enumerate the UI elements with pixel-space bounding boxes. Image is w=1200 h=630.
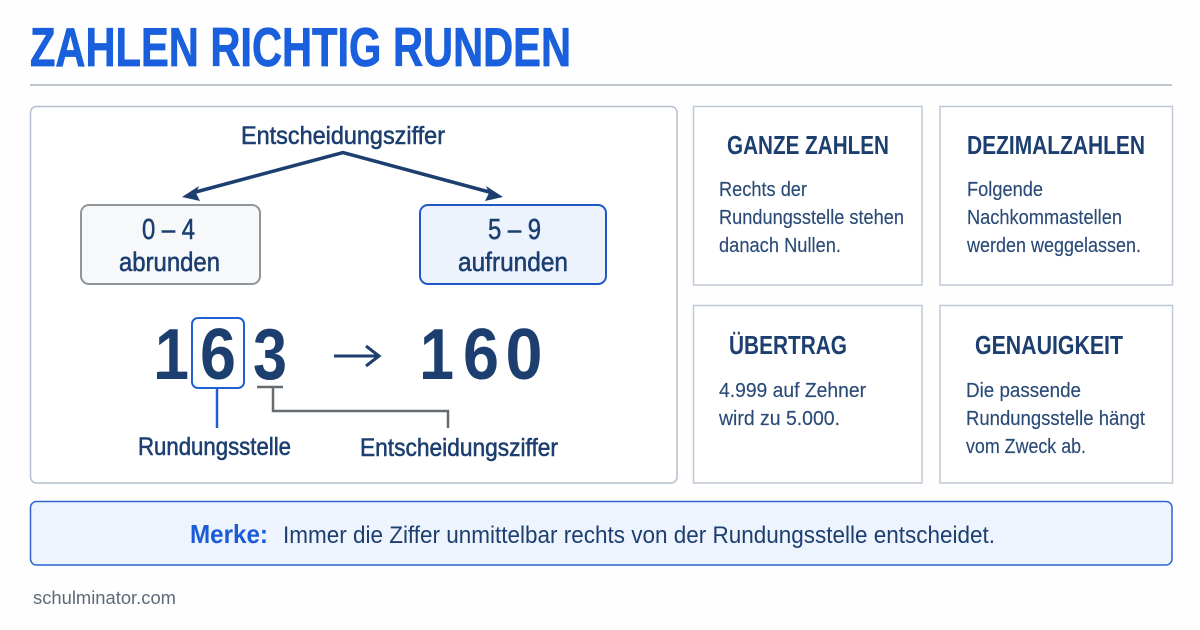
rule box: abrunden: abrunden [119,247,220,277]
rule box: abrunden [81,205,260,284]
rule box: abrunden: 0 – 4 [142,214,195,246]
result number 160: 1 [420,315,454,395]
panel: Übertrag: 4.999 auf Zehner [719,380,866,402]
panel: Ganze Zahlen [694,106,922,285]
panel: Genauigkeit: vom Zweck ab. [966,436,1086,458]
example number 163: 3 [253,315,287,395]
rule box: aufrunden: 5 – 9 [488,214,541,246]
title: ZAHLEN RICHTIG RUNDEN [30,16,571,78]
callout: Merke: Merke: [190,519,268,549]
arrows to both rules [182,152,503,201]
panel: Ganze Zahlen: GANZE ZAHLEN [727,130,889,160]
panel: rounding diagram [30,106,677,483]
panel: Genauigkeit: Rundungsstelle hängt [966,408,1145,430]
example number 163 [155,315,287,395]
panel: Dezimalzahlen: Folgende [967,179,1043,201]
panel: Dezimalzahlen [940,106,1172,285]
result number 160 [420,315,542,395]
panel: Übertrag: ÜBERTRAG [729,330,847,360]
panel: Übertrag [694,306,922,483]
panel: Dezimalzahlen: Nachkommastellen [967,207,1122,229]
example number 163: 1 [155,315,189,395]
callout: Merke [30,502,1172,565]
panel: Genauigkeit: Die passende [966,380,1081,402]
highlight: rounding digit [192,318,244,388]
arrow: result [334,346,379,366]
label: Rundungsstelle: Rundungsstelle [138,433,291,461]
connector: Rundungsstelle [216,388,218,428]
heading: Entscheidungsziffer: Entscheidungsziffer [241,122,445,150]
panel: Dezimalzahlen: werden weggelassen. [966,235,1141,257]
panel: Übertrag: wird zu 5.000. [718,408,840,430]
panel: Ganze Zahlen: danach Nullen. [719,235,841,257]
connector: Entscheidungsziffer [257,387,448,428]
label: Entscheidungsziffer: Entscheidungsziffer [360,434,558,462]
example number 163: 6 [200,315,236,395]
panel: Dezimalzahlen: DEZIMALZAHLEN [967,130,1145,160]
callout: Merke: Immer die Ziffer unmittelbar rechts von der Rundungsstelle entscheidet. [283,522,995,549]
panel: Genauigkeit [940,306,1172,483]
panel: Genauigkeit: GENAUIGKEIT [975,330,1123,360]
result number 160: 6 [463,315,499,395]
rule box: aufrunden: aufrunden [458,247,568,277]
panel: Ganze Zahlen: Rechts der [719,179,807,201]
rule box: aufrunden [420,205,606,284]
footer: source: schulminator.com [33,588,176,608]
result number 160: 0 [506,315,542,395]
panel: Ganze Zahlen: Rundungsstelle stehen [719,207,904,229]
